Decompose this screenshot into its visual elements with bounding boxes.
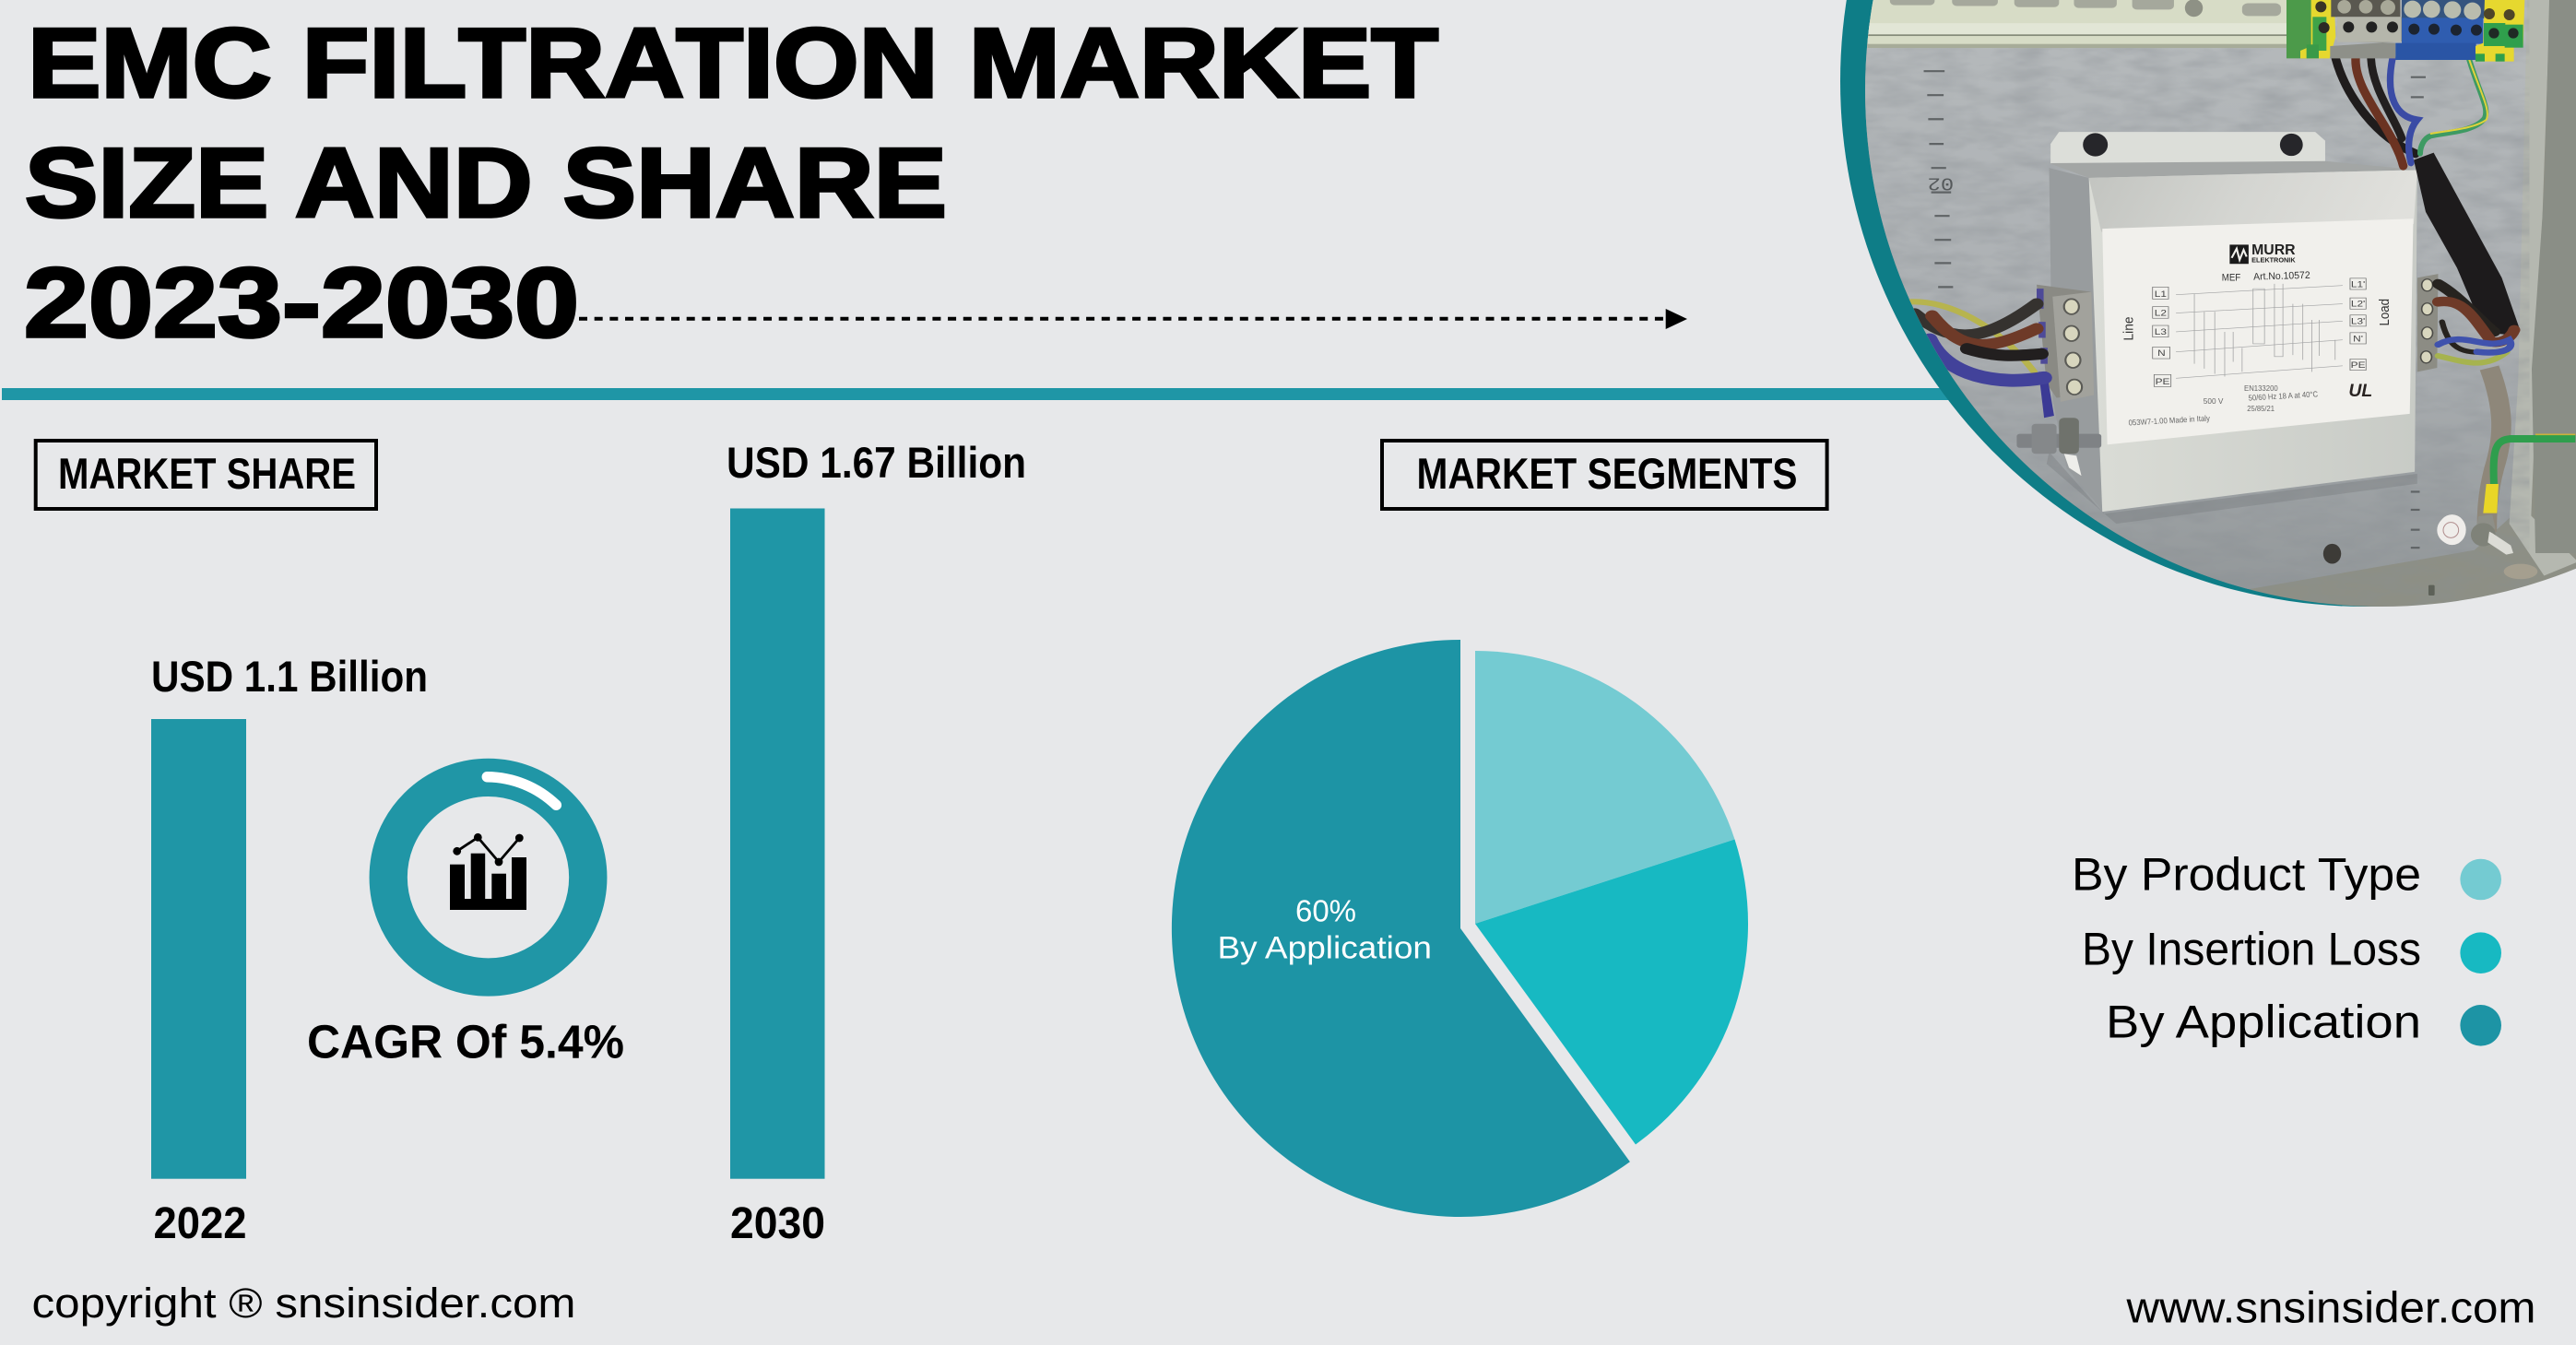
terminal labels: PE (2351, 360, 2365, 371)
terminal labels: N (2157, 348, 2166, 359)
ring (388, 777, 588, 977)
rating text: 50/60 Hz 18 A at 40°C (2248, 390, 2318, 403)
CAGR badge (307, 777, 624, 1068)
terminal strip and top wires (2286, 0, 2524, 166)
photo circle: EMC filter in enclosure (1798, 0, 2576, 627)
terminal labels: PE (2156, 377, 2169, 386)
terminal labels: L2 (2155, 309, 2167, 318)
yellow-green terminals (2476, 0, 2524, 62)
green end block (2286, 0, 2312, 58)
grounding bolt (2016, 418, 2101, 476)
market segments heading: MARKET SEGMENTS (1416, 449, 1798, 498)
certification mark: UL (2348, 381, 2372, 401)
terminal labels: N' (2353, 334, 2363, 344)
dotted timeline arrow (579, 309, 1687, 329)
terminal labels: L3' (2351, 316, 2365, 326)
brand name: MURR (2251, 242, 2296, 257)
title (24, 7, 1438, 358)
bar 2030: 2030 (730, 1199, 825, 1248)
plate hole (2323, 544, 2341, 564)
bar 2022: 2022 (153, 1199, 247, 1248)
legend (2072, 849, 2501, 1048)
slice: by insertion loss (1475, 839, 1748, 1145)
title line 3: 2023-2030 (24, 247, 579, 358)
brand logo (2229, 244, 2249, 264)
slice: by application (1172, 640, 1630, 1217)
blue terminals (2402, 0, 2485, 18)
ruler marks and number (1924, 71, 2426, 548)
housing right side (2532, 0, 2569, 553)
rating text: 053W7-1.00 Made in Italy (2128, 414, 2210, 428)
braided ground strap (2487, 368, 2501, 532)
right terminal block (2417, 274, 2438, 372)
article number: MEF (2222, 272, 2240, 283)
title line 1: EMC FILTRATION MARKET (28, 7, 1438, 118)
slice label (1217, 894, 1432, 966)
slice label: By Application (1217, 931, 1432, 966)
bar chart: market size (151, 438, 1026, 1248)
rating text: 500 V (2204, 397, 2224, 407)
teal divider bar (2, 388, 2576, 400)
market share heading (36, 441, 376, 509)
footer: copyright: copyright ® snsinsider.com (31, 1280, 575, 1327)
bar 2022: USD 1.1 Billion (151, 652, 428, 701)
legend item: by insertion loss: By Insertion Loss (2082, 924, 2421, 975)
mounting flange (2050, 132, 2325, 164)
legend item: by application: By Application (2106, 997, 2421, 1048)
market segments heading (1382, 441, 1827, 509)
ground symbol sticker (2438, 514, 2466, 545)
grey terminals (2331, 0, 2400, 17)
title line 2: SIZE AND SHARE (25, 127, 947, 238)
left wires (1909, 301, 2044, 381)
plate number: 02 (1928, 172, 1954, 192)
slice label: 60% (1295, 894, 1356, 927)
DIN rail (1868, 0, 2289, 48)
right wires (2438, 284, 2514, 363)
photo (1865, 0, 2576, 607)
teal circle backing (1840, 0, 2576, 607)
filter box side (2049, 168, 2098, 456)
black cable (2414, 153, 2519, 335)
terminal labels: L1' (2351, 279, 2365, 289)
bar 2030: USD 1.67 Billion (727, 438, 1026, 487)
rating text (2128, 384, 2318, 428)
legend item: by product type: By Product Type (2072, 849, 2421, 901)
circuit diagram (2176, 284, 2343, 378)
CAGR label: CAGR Of 5.4% (307, 1016, 624, 1068)
icon: chart (450, 833, 526, 910)
footer: website: www.snsinsider.com (2125, 1283, 2535, 1331)
pie chart (1172, 640, 1748, 1217)
filter label (2102, 218, 2413, 444)
terminal labels (2155, 279, 2365, 386)
filter box front (2089, 170, 2417, 512)
ring highlight (487, 777, 556, 805)
terminal labels: L3 (2155, 327, 2167, 337)
market share heading: MARKET SHARE (58, 449, 356, 498)
rating text: EN133200 (2244, 384, 2278, 394)
filter label: ELEKTRONIK (2251, 255, 2296, 264)
filter label: Art.No.10572 (2253, 269, 2310, 282)
slice: by product type (1475, 651, 1735, 924)
terminal labels: L1 (2155, 289, 2167, 299)
bar 2022 (151, 652, 428, 1248)
ground wire and lug (2428, 434, 2575, 596)
mounting plate (1865, 0, 2527, 589)
rating text: 25/85/21 (2247, 405, 2275, 414)
left terminal block (2037, 285, 2094, 418)
line label: Line (2121, 316, 2136, 341)
enclosure frame strip (2510, 0, 2576, 576)
load label: Load (2377, 299, 2392, 325)
terminal labels: L2' (2351, 300, 2365, 309)
bar 2030 (727, 438, 1026, 1248)
wires (2335, 58, 2487, 166)
box shadow on plate (2047, 452, 2417, 524)
